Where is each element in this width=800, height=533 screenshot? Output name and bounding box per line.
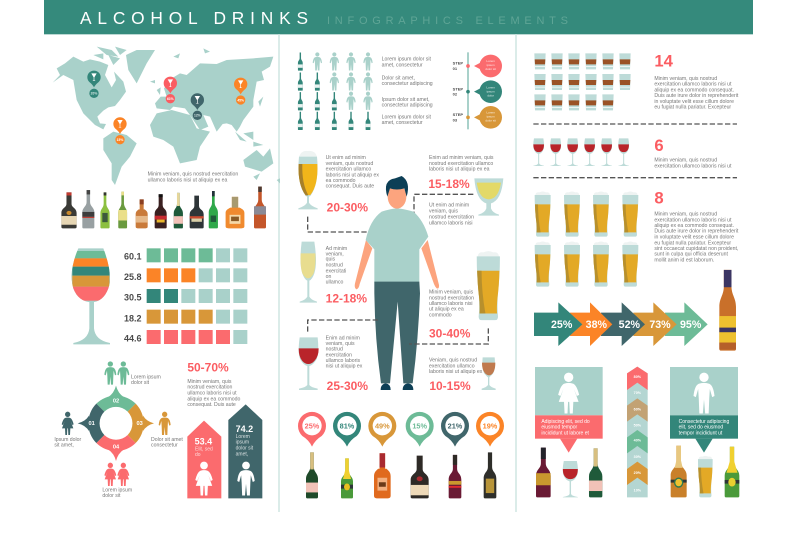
data values: 18.2 <box>124 313 142 323</box>
text block: ut aliquip ex ea <box>429 307 464 313</box>
steps timeline: dolor sit <box>485 118 496 122</box>
world map <box>53 47 280 185</box>
chevron scale: 30% <box>634 455 642 459</box>
donut captions: sit amet, <box>54 443 74 449</box>
steps timeline <box>453 52 502 129</box>
text block: mollit anim id est laborum. <box>654 257 714 263</box>
text block: veniam, <box>326 252 344 258</box>
pins and bottles row: 49% <box>375 421 390 430</box>
people icons: green <box>104 361 129 385</box>
text block: Minim veniam, quis nostrud <box>654 76 717 82</box>
red arrow bar <box>187 421 221 498</box>
chevron scale: 80% <box>634 375 642 379</box>
chevron scale: 20% <box>634 471 642 475</box>
donut diagram: 02 <box>113 399 119 405</box>
text block: exercitation ullamco <box>429 363 475 369</box>
text block: aliquip ex ea commodo consequat. <box>654 87 734 93</box>
pictogram captions: amet, consectetur <box>382 62 423 68</box>
pins and bottles row <box>298 412 504 498</box>
number 8: 8 <box>654 188 664 207</box>
arrow chain: 38% <box>586 319 608 331</box>
pins and bottles row: 21% <box>448 421 463 430</box>
data values: 44.6 <box>124 334 142 344</box>
map pin: middle east: 12% <box>194 114 201 118</box>
pictogram captions: Ipsum dolor sit amet, <box>382 97 430 103</box>
chevron scale: 60% <box>634 407 642 411</box>
text block: exercitation ullamco laboris nisi ut <box>654 163 732 169</box>
red arrow bar: 53.4 <box>195 436 212 446</box>
chevron scale: 70% <box>634 391 642 395</box>
text block: nostrud exercitation <box>187 385 232 391</box>
text block: exercitati <box>326 268 346 274</box>
text block: laboris nisi ut aliquip ex <box>326 172 379 178</box>
text block: nostrud <box>326 262 343 268</box>
dark arrow bar: 74.2 <box>236 424 253 434</box>
text block: ullamco laboris nisi <box>429 220 473 226</box>
pins and bottles row: 19% <box>483 421 498 430</box>
red arrow bar: do <box>195 452 201 458</box>
number 14: 14 <box>654 52 674 71</box>
bottom bottles and glasses <box>536 446 739 497</box>
steps timeline: Lorem <box>486 85 495 89</box>
text block: ullamco <box>326 280 344 286</box>
header banner <box>44 0 753 34</box>
bottles and people pictogram <box>298 52 373 130</box>
chevron scale: 40% <box>634 438 642 442</box>
map pin: middle east <box>191 93 204 120</box>
text block: aliquip ex ea commodo <box>187 396 240 402</box>
red wine glasses <box>533 138 629 166</box>
whisky shots pictogram <box>534 53 631 110</box>
donut captions: Lorem ipsum <box>131 374 161 380</box>
steps timeline: STEP <box>453 61 463 66</box>
dark arrow bar: amet, <box>236 451 248 457</box>
text block: ullamco laboris <box>326 358 360 364</box>
small brown wine glass <box>482 357 496 390</box>
steps timeline: dolor sit <box>485 67 496 71</box>
text block: Minim veniam, quis nostrud <box>654 158 717 164</box>
panel: world map and bottles <box>53 47 280 228</box>
text block: laboris nisi ut aliquip ex <box>429 369 483 375</box>
text block: eu fugiat nulla pariatur. Excepteur <box>654 240 731 246</box>
man figure <box>355 176 439 390</box>
steps timeline: STEP <box>453 112 463 117</box>
steps timeline: ipsum <box>487 114 495 118</box>
steps timeline: Lorem <box>486 59 495 63</box>
steps timeline: dolor <box>487 93 494 97</box>
text block: aliquip ex ea commodo consequat. <box>654 223 734 229</box>
text block: on <box>326 274 332 280</box>
bottle row <box>61 187 266 228</box>
panel: right column <box>533 52 739 497</box>
percentage: 15-18% <box>428 177 470 191</box>
chevron scale <box>627 367 648 497</box>
donut captions: dolor sit <box>102 493 121 499</box>
steps timeline: 02 <box>453 92 458 97</box>
card: female: Adipiscing elit, sed do <box>541 419 590 425</box>
steps timeline: ipsum <box>487 63 495 67</box>
text block: nostrud exercitation <box>429 295 474 301</box>
text block: in voluptate velit esse cillum dolore <box>654 99 734 105</box>
data values <box>124 251 142 344</box>
donut captions: Dolor sit amet <box>151 437 183 443</box>
text block: consequat. Duis aute <box>187 402 236 408</box>
card: male: Consectetur adipiscing <box>679 419 729 425</box>
wide wine glass <box>474 178 503 216</box>
data values: 30.5 <box>124 293 142 303</box>
people icon: dark <box>62 412 74 435</box>
text block: Minim veniam, quis <box>187 379 232 385</box>
people icons: red <box>104 463 129 486</box>
percentage: 10-15% <box>429 379 471 393</box>
text block: sint occaecat cupidatat non proident, <box>654 246 738 252</box>
text block: veniam, quis <box>429 209 458 215</box>
pictogram captions: Lorem ipsum dolor sit <box>382 57 432 63</box>
dark arrow bar: Lorem <box>236 434 250 440</box>
people icon: ochre <box>159 412 171 435</box>
text block: Veniam, quis nostrud <box>429 357 477 363</box>
card: male: tempor incididunt ut <box>679 430 723 436</box>
donut diagram: 01 <box>89 421 95 427</box>
text block: nostrud exercitation <box>429 214 474 220</box>
percentage: 20-30% <box>327 200 368 214</box>
text block: consequat. Duis aute <box>326 184 374 190</box>
text block: Minim veniam, quis nostrud <box>654 212 717 218</box>
map pin: north america <box>87 71 101 98</box>
donut captions: dolor sit <box>131 380 150 386</box>
map pin: south america <box>113 117 127 144</box>
map pin: asia <box>234 78 247 105</box>
dark arrow bar: dolor sit <box>236 446 254 452</box>
subtitle: INFOGRAPHICS ELEMENTS <box>327 15 568 27</box>
beer pint <box>477 251 500 320</box>
champagne flute <box>300 242 317 303</box>
arrow chain: 73% <box>649 319 671 331</box>
pins and bottles row: 81% <box>340 421 355 430</box>
card: female: eiusmod tempor <box>541 425 578 431</box>
map pin: north america: 20% <box>91 92 97 96</box>
donut diagram: 03 <box>137 421 143 427</box>
percentage heading: 50-70% <box>187 361 229 375</box>
percentage: 12-18% <box>326 292 367 306</box>
percentage: 30-40% <box>429 326 471 340</box>
donut captions: consectetur <box>151 443 178 449</box>
text block: exercitation ullamco <box>326 167 371 173</box>
map caption: Minim veniam, quis nostrud exercitation <box>148 172 238 178</box>
text block: Duis aute irure dolor in reprehenderit <box>654 229 739 235</box>
card: male: elit, sed do eiusmod <box>679 425 723 431</box>
pictogram captions: Dolor sit amet, <box>382 75 415 81</box>
pins and bottles row: 25% <box>305 421 320 430</box>
dark arrow bar: ipsum <box>236 440 249 446</box>
text block: nostrud exercitation ullamco <box>429 161 493 167</box>
text block: veniam, quis nostrud <box>326 161 373 167</box>
map pin: asia: 45% <box>237 98 244 102</box>
arrow chain: 52% <box>619 319 641 331</box>
donut diagram <box>78 386 154 461</box>
text block: Ad minim <box>326 246 347 252</box>
chevron scale: 50% <box>634 424 642 428</box>
text block: eu fugiat nulla pariatur. Excepteur <box>654 105 731 111</box>
text block: laboris nisi ut aliquip ex ea <box>429 167 490 173</box>
wine glass with colour bands <box>72 248 110 344</box>
panel: wine glass chart and people <box>54 248 262 499</box>
panel: centre column <box>298 52 504 498</box>
text block: Ut enim ad minim <box>429 203 469 209</box>
pins and bottles row: 15% <box>412 421 427 430</box>
map pin: europe <box>164 77 177 103</box>
donut captions <box>54 374 183 499</box>
donut captions: Lorem ipsum <box>102 487 132 493</box>
card: male <box>670 367 738 453</box>
chevron scale: 10% <box>634 488 642 492</box>
steps timeline: STEP <box>453 86 463 91</box>
text block: nostrud <box>326 347 343 353</box>
steps timeline: ipsum <box>487 89 495 93</box>
red wine glass <box>299 337 319 390</box>
text block: Enim ad minim <box>326 335 360 341</box>
map caption: ullamco laboris nisi ut aliquip ex ea <box>148 177 227 183</box>
text block: in voluptate velit esse cillum dolore <box>654 235 734 241</box>
data values: 60.1 <box>124 251 142 261</box>
square grid chart <box>147 248 247 344</box>
dark arrow bar <box>228 404 262 498</box>
data values: 25.8 <box>124 272 142 282</box>
pictogram captions: amet, consectetur <box>382 120 423 126</box>
text block: ullamco laboris nisi <box>429 301 473 307</box>
text block: exercitation ullamco laboris nisi ut <box>654 82 732 88</box>
pictogram captions <box>382 57 433 126</box>
pictogram captions: consectetur adipiscing <box>382 103 433 109</box>
tall bottle <box>719 270 736 351</box>
donut diagram: 04 <box>113 444 120 450</box>
arrow chain: 25% <box>551 319 573 331</box>
number 6: 6 <box>654 136 664 155</box>
text block: quis <box>326 257 336 263</box>
text block: Minim veniam, quis <box>429 289 474 295</box>
text block: exercitation ullamco laboris nisi ut <box>654 217 732 223</box>
text block: ea commodo <box>326 178 356 184</box>
map pin: south america: 15% <box>117 138 123 142</box>
text block: ullamco laboris nisi ut <box>187 390 237 396</box>
steps timeline: 01 <box>453 66 458 71</box>
pictogram captions: consectetur adipiscing <box>382 81 433 87</box>
beer goblet <box>298 151 318 209</box>
text block: Enim ad minim veniam, quis <box>429 155 494 161</box>
card: female: incididunt ut labore et <box>541 430 589 436</box>
text block: veniam, quis <box>326 341 355 347</box>
beer glasses <box>535 192 638 287</box>
title: ALCOHOL DRINKS <box>80 8 308 28</box>
red arrow bar: Elit, sed <box>195 446 213 452</box>
steps timeline: Lorem <box>486 110 495 114</box>
arrow chain <box>534 302 708 346</box>
donut captions: Ipsum dolor <box>54 437 82 443</box>
text block: exercitation <box>326 352 352 358</box>
text block: Duis aute irure dolor in reprehenderit <box>654 93 739 99</box>
arrow chain: 95% <box>680 319 702 331</box>
text block: nisi ut aliquip ex <box>326 364 363 370</box>
pictogram captions: Lorem ipsum dolor sit <box>382 114 432 120</box>
steps timeline: 03 <box>453 117 458 122</box>
percentage: 25-30% <box>327 379 368 393</box>
text block: Ut enim ad minim <box>326 155 366 161</box>
text block: commodo <box>429 312 452 318</box>
map pin: europe: 61% <box>167 97 174 101</box>
text block: sunt in culpa qui officia deserunt <box>654 252 728 258</box>
card: female <box>535 367 603 453</box>
